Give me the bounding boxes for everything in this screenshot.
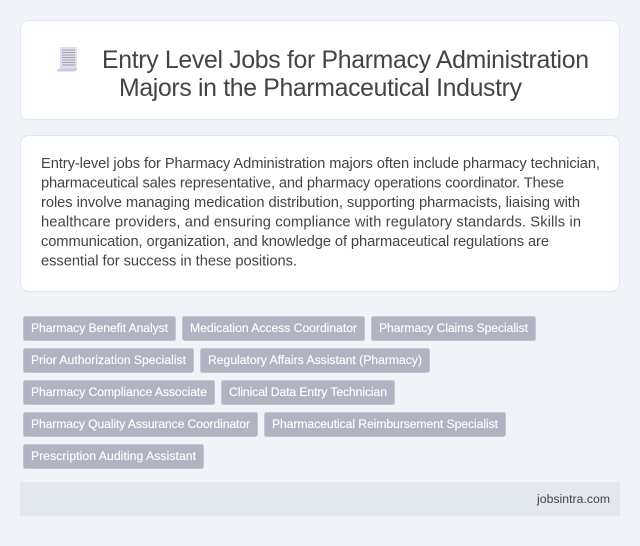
text block: description: Entry-level jobs for Pharmacy Administration majors often include pharmacy technician, [41,156,600,172]
tag: Prior Authorization Specialist [24,348,194,372]
text block: description: essential for success in these positions. [41,254,297,270]
text block: description [41,156,600,270]
tag: Clinical Data Entry Technician [222,380,394,404]
text block: description: roles involve managing medication distribution, supporting pharmacists, liaising with [41,195,580,211]
title: Majors in the Pharmaceutical Industry [119,75,523,102]
tag: Pharmacy Compliance Associate [24,380,214,404]
text block: description: pharmaceutical sales representative, and pharmacy operations coordinator. These [41,176,564,192]
tag: Medication Access Coordinator [182,316,364,340]
tag: Pharmacy Quality Assurance Coordinator [24,412,258,436]
tag: Pharmacy Benefit Analyst [24,316,176,340]
tag: Pharmacy Compliance Associate: Pharmacy Compliance Associate [31,385,207,399]
tag: Regulatory Affairs Assistant [200,348,430,372]
tag: Prescription Auditing Assistant: Prescription Auditing Assistant [31,449,197,463]
text block: description: healthcare providers, and ensuring compliance with regulatory standards. Skills in [41,214,581,230]
panel: description card [20,136,620,292]
text block: description: communication, organization, and knowledge of pharmaceutical regulations are [41,234,549,250]
tag: Clinical Data Entry Technician: Clinical Data Entry Technician [229,385,387,399]
title [102,47,589,102]
tag: Pharmacy Claims Specialist: Pharmacy Claims Specialist [379,321,529,335]
panel: title card [20,20,620,120]
tag: Pharmacy Quality Assurance Coordinator: Pharmacy Quality Assurance Coordinator [31,417,250,431]
tag: Prescription Auditing Assistant [24,444,204,468]
tag: Regulatory Affairs Assistant: Regulatory Affairs Assistant (Pharmacy) [208,353,422,367]
title: Entry Level Jobs for Pharmacy Administration [102,47,589,74]
tag: Pharmacy Claims Specialist [372,316,536,340]
tag: Pharmaceutical Reimbursement Specialist [264,412,506,436]
footer bar [20,482,620,516]
tag: Prior Authorization Specialist: Prior Authorization Specialist [31,353,187,367]
tag: Pharmaceutical Reimbursement Specialist: Pharmaceutical Reimbursement Specialist [272,417,499,431]
footer text: source: jobsintra.com [536,492,610,506]
icon: document scroll [57,47,77,72]
tag: Pharmacy Benefit Analyst: Pharmacy Benefit Analyst [31,321,169,335]
tag list [24,316,536,468]
tag: Medication Access Coordinator: Medication Access Coordinator [190,321,357,335]
